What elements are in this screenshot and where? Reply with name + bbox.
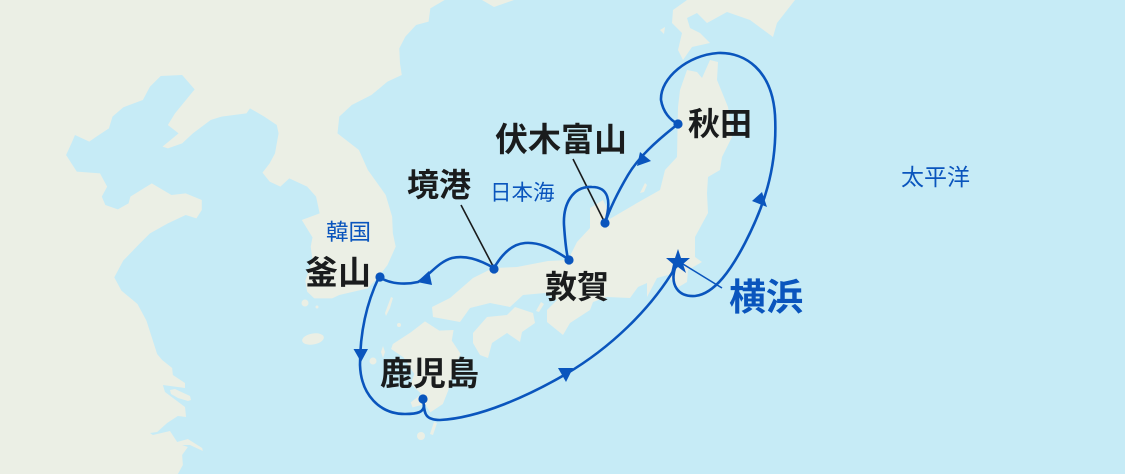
label: Tsuruga: 敦賀 bbox=[545, 269, 609, 305]
land: Awaji island bbox=[536, 302, 544, 312]
marker: Tsuruga bbox=[564, 255, 574, 265]
label: Pacific Ocean: 太平洋 bbox=[901, 164, 970, 190]
land: small islands bbox=[302, 27, 665, 440]
route: Kagoshima to Yokohama bbox=[423, 268, 675, 420]
label: Kagoshima: 鹿児島 bbox=[380, 355, 479, 392]
arrow: toward Kagoshima bbox=[354, 349, 368, 362]
route: Yokohama to Akita bbox=[661, 53, 775, 296]
label: Sea of Japan: 日本海 bbox=[490, 181, 555, 205]
land: Hokkaido bbox=[672, 0, 795, 60]
marker: Kagoshima bbox=[418, 394, 428, 404]
land: Tsushima bbox=[385, 297, 393, 316]
route: Akita to Fushiki-Toyama bbox=[605, 124, 678, 223]
land: Jeju bbox=[301, 332, 325, 346]
marker: Busan bbox=[375, 272, 385, 282]
marker: Sakaiminato bbox=[489, 264, 499, 274]
route: Fushiki-Toyama to Tsuruga bbox=[564, 187, 608, 259]
land: small island at top edge bbox=[482, 0, 514, 7]
land: mainland Asia and Korea bbox=[0, 0, 445, 474]
route: Sakaiminato to Busan bbox=[379, 257, 494, 284]
label: Yokohama: 横浜 bbox=[729, 277, 803, 318]
label: Busan: 釜山 bbox=[305, 254, 371, 291]
label: Akita: 秋田 bbox=[688, 106, 752, 142]
land masses bbox=[0, 0, 795, 474]
icon: star Yokohama bbox=[666, 249, 690, 273]
marker: Akita bbox=[673, 119, 683, 129]
arrowheads bbox=[354, 152, 767, 382]
cruise route bbox=[360, 53, 775, 420]
arrow: toward Yokohama bbox=[558, 368, 573, 382]
leader: Fushiki-Toyama bbox=[573, 159, 605, 223]
arrow: toward Akita bbox=[752, 192, 767, 207]
route: Tsuruga to Sakaiminato bbox=[494, 243, 568, 268]
label: Korea: 韓国 bbox=[326, 220, 371, 245]
label: Sakaiminato: 境港 bbox=[407, 167, 471, 203]
label: Fushiki-Toyama: 伏木富山 bbox=[495, 121, 627, 158]
arrow: toward Busan bbox=[417, 271, 432, 285]
arrow: toward Fushiki-Toyama bbox=[637, 152, 651, 166]
marker: Fushiki-Toyama bbox=[600, 218, 610, 228]
land: Kyushu bbox=[391, 321, 461, 412]
leader: Sakaiminato bbox=[461, 205, 494, 268]
land: Shikoku bbox=[473, 307, 535, 358]
leader: Yokohama bbox=[678, 261, 722, 288]
leader lines bbox=[461, 159, 722, 288]
port markers bbox=[375, 119, 690, 404]
land: Chongming island bbox=[170, 389, 191, 401]
land: Honshu bbox=[432, 60, 732, 335]
route: Busan to Kagoshima bbox=[360, 277, 424, 414]
